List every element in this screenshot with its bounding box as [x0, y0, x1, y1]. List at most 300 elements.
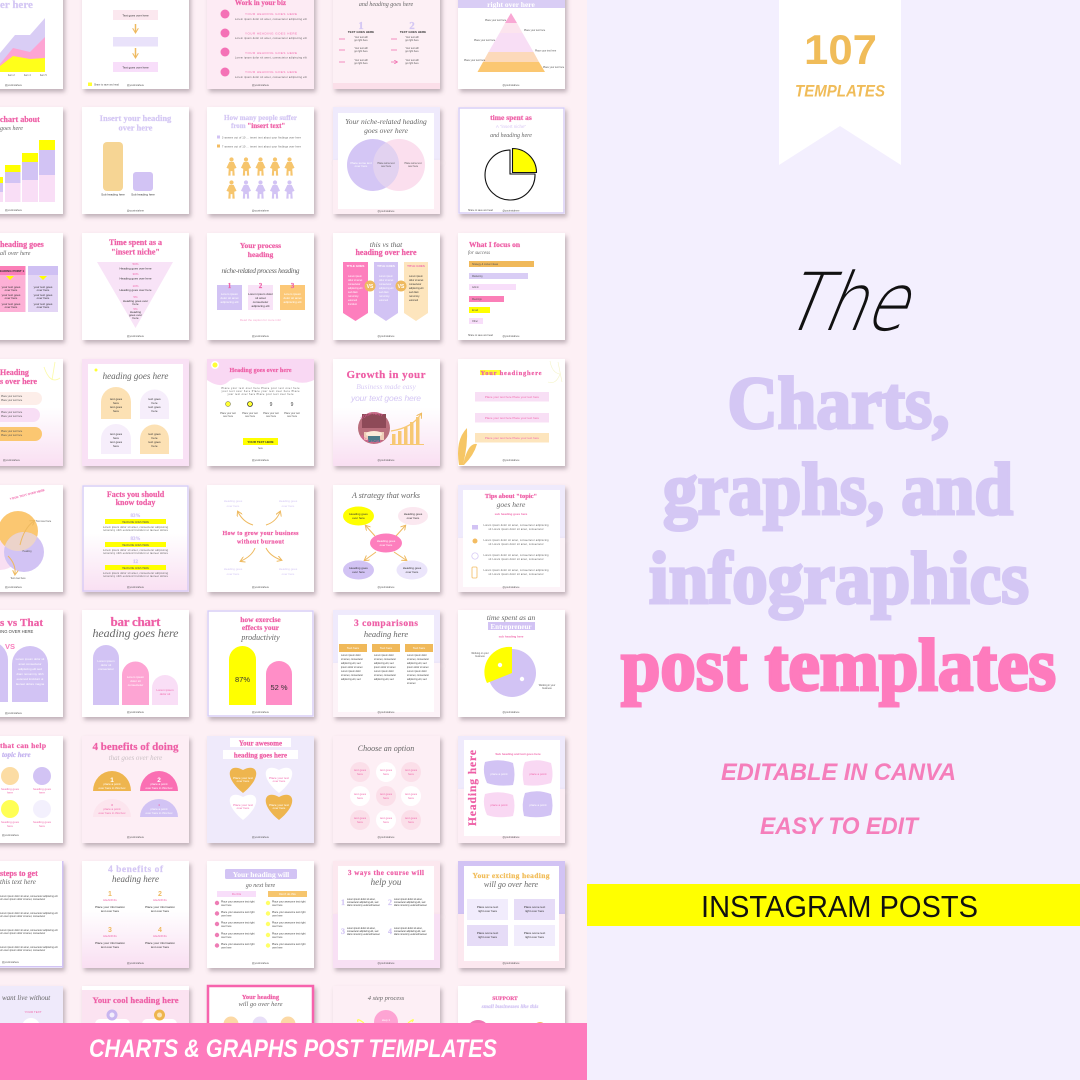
card: 3 ways: consectetur adipiscing elit, sed [347, 901, 379, 904]
card: 3 comparisons: Text here [347, 646, 359, 650]
card: stacked bar chart: goes here [0, 126, 23, 132]
card: numbered list [207, 0, 314, 89]
card: venn flow with arrows: YOUR TEXT OVER HERE [10, 488, 45, 500]
card: ribbon comparison: heading over here [355, 248, 417, 257]
card: two bars: Sub heading here [131, 192, 155, 196]
card: venn flow with arrows [0, 485, 68, 598]
card: two column checklist: @yourinstahere [252, 962, 270, 965]
card: stacked bar chart: @yourinstahere [5, 209, 23, 212]
card: four arrows radial: Heading goes [279, 499, 298, 503]
card: two column checklist: go next here [246, 883, 276, 889]
card: choose an option: here [357, 820, 363, 824]
card: funnel: Heading goes over [123, 299, 148, 303]
card: 4 step process: 4 step process [368, 995, 405, 1002]
card: choose an option: here [408, 796, 414, 800]
card: pyramid: Place your text here [535, 50, 557, 52]
card: entrepreneur pie: time spent as an [487, 613, 536, 622]
card: pie chart with yellow slice: Share to save and read [468, 209, 494, 212]
card: ribbon comparison: Lorem ipsum [348, 275, 362, 278]
card: pie chart with yellow slice [458, 107, 565, 214]
card: comparison panels: all over here [0, 251, 31, 257]
card: 3 ways: @yourinstahere [378, 962, 395, 965]
card: ribbon comparison: tincidunt [348, 303, 357, 306]
card: facts: Lorem ipsum dolor sit amet, consectetur adipiscing [103, 572, 169, 575]
card: two column arrows [333, 0, 440, 89]
card: can't live without: YOUR TEXT [24, 1010, 42, 1014]
card: pink border heading: will go over here [238, 1001, 283, 1008]
card: ribbon comparison: TITLE GOES [347, 264, 364, 268]
card: heading with leaf: Place your text here Place your text here [485, 436, 539, 440]
ribbon badge: 107 templates [779, 0, 901, 165]
card: two column arrows: go right here [354, 62, 368, 65]
card: horizontal bar chart: for success [468, 251, 490, 256]
card: cool heading flowers [82, 986, 189, 1080]
card: 4 step process [333, 986, 440, 1080]
card: process steps: Read the caption for more info! [240, 318, 281, 322]
card: heading with leaf [458, 359, 565, 466]
card: pyramid: Place your text here [464, 59, 486, 62]
card: stacked blobs: Place your text here [1, 395, 23, 398]
card: four colored circles: here [7, 790, 13, 794]
card: tips with icons: sub heading goes here [495, 512, 528, 516]
card: ribbon comparison: dolor sit amet [409, 279, 424, 282]
card: mind map: over here [352, 570, 365, 574]
card: can't live without [0, 986, 63, 1080]
card: venn diagram: @yourinstahere [378, 210, 395, 213]
card: horizontal bar chart: Marketing [472, 275, 483, 278]
card: heading with leaf: Place your text here Place your text here [485, 395, 539, 399]
card: 4 benefits domes: place a point [150, 782, 168, 786]
card: 3 ways: 2 [388, 898, 392, 907]
card: venn diagram: over here [381, 165, 392, 168]
card: mind map: over here [407, 516, 420, 520]
card: choose an option: here [383, 820, 389, 824]
card: funnel: Heading goes over here [119, 288, 152, 292]
card: ribbon comparison: @yourinstahere [378, 335, 395, 338]
card: hearts: heading goes here [234, 752, 287, 760]
card: process steps: Your process [240, 241, 281, 250]
card: venn flow with arrows: Heading [23, 550, 32, 553]
card: arch bar chart: Lorem ipsum [156, 688, 174, 692]
right panel [587, 0, 1080, 1080]
card: two column checklist: Place your awesome text right [221, 922, 255, 924]
card: 4 benefits numbered: 1 [108, 891, 112, 898]
card: people pictogram: 3 women out of 10 ... insert text about your findings over here [222, 136, 302, 140]
card: two column arrows: TEXT GOES HERE [400, 30, 426, 34]
card: funnel [82, 233, 189, 340]
card: 4 benefits domes: 1 [110, 777, 114, 784]
card: pyramid: Place your text here [485, 19, 507, 22]
card: mind map: A strategy that works [351, 491, 420, 500]
card: comparison panels: over here [37, 305, 50, 309]
card: process steps: 2 [259, 282, 263, 290]
card: horizontal bar chart: @yourinstahere [503, 335, 520, 338]
card: four colored circles: here [39, 790, 45, 794]
card: ribbon comparison: euismod [348, 299, 358, 302]
card: ribbon comparison: TITLE GOES [377, 264, 395, 268]
card: four colored circles: @yourinstahere [2, 834, 20, 837]
card: steps to get: Lorem ipsum dolor sit amet, consectetur adipiscing elit [0, 895, 58, 898]
card: 3 comparisons: adipiscing elit, sed [407, 662, 427, 665]
card: 4 benefits numbered: text over here [151, 909, 170, 913]
card: two column arrows: Your text will [354, 36, 368, 39]
card: two column arrows: go right here [405, 62, 419, 65]
card: entrepreneur pie: business [542, 687, 553, 690]
card: four arches: here [151, 436, 158, 440]
card: ribbon comparison: Lorem ipsum [379, 275, 393, 278]
card: ribbon comparison: nonummy [348, 295, 359, 298]
card: this vs that arches: laoreet dolore magna [16, 682, 45, 686]
card: comparison panels: heading goes [0, 240, 44, 249]
card: process steps: sit amet [255, 296, 266, 300]
card: hearts: Place your text [269, 776, 289, 780]
card: process steps: dolor sit amet [220, 296, 239, 300]
card: facts: 83% [130, 514, 140, 519]
card: 4 benefits numbered: HEADING [153, 898, 167, 902]
card: comparison panels: your text goes [2, 302, 21, 306]
card: ribbon comparison: euismod [409, 299, 419, 302]
card: hearts: over here [237, 779, 250, 783]
card: four colored circles: heading goes [1, 787, 20, 791]
card: wavy header with icons: Place your text over here Place your text over here [222, 387, 300, 390]
card: 4 benefits numbered: @yourinstahere [127, 962, 145, 965]
card: 4 benefits numbered: 3 [108, 927, 112, 934]
card: exciting heading boxes: right over here [525, 909, 545, 913]
card: ribbon comparison: TITLE GOES [407, 264, 425, 268]
card: steps to get: this text here [0, 878, 36, 886]
card: mind map: Heading goes [349, 512, 368, 516]
card: steps to get [0, 861, 64, 968]
card: exciting heading boxes: Place some text [524, 905, 545, 909]
card: four colored circles: heading goes [1, 820, 20, 824]
card: facts: Facts you should [107, 490, 165, 499]
card: four arches: text goes [110, 397, 123, 401]
card: this vs that arches [0, 610, 63, 717]
card: four arches: text goes [148, 397, 161, 401]
card: 4 benefits domes: place a point [103, 807, 121, 811]
card: mind map: Heading goes [403, 566, 422, 570]
card: numbered list: @yourinstahere [252, 84, 270, 87]
card: pyramid: Place your text here [524, 29, 546, 32]
card: 4 benefits numbered: HEADING [103, 898, 117, 902]
card: wavy header with icons: your text over here Place your text over here Place [222, 390, 300, 393]
card: support small business [458, 986, 565, 1080]
card: 3 ways: 3 [341, 927, 345, 936]
card: funnel: 5% [133, 307, 138, 311]
card: four arches: text goes [148, 432, 161, 436]
card: facts: nonummy nibh euismod tincidunt ut laoreet dolore [103, 552, 169, 555]
card: comparison panels: your text goes [34, 285, 53, 289]
card: two column checklist: Place your awesome text right [272, 932, 306, 936]
card: steps to get: Lorem ipsum dolor sit amet, consectetur adipiscing elit [0, 912, 58, 915]
card: process steps [207, 233, 314, 340]
card: this vs that arches: diam nonummy nibh [16, 672, 44, 676]
card: funnel: 5% [133, 295, 138, 299]
card: comparison panels: your text goes [34, 293, 53, 297]
card: four arches: text goes [148, 405, 161, 409]
card: exciting heading boxes: right over here [478, 935, 498, 939]
card: yellow and pink arch percentages: effects your [242, 623, 280, 632]
card: arch bar chart: @yourinstahere [127, 711, 145, 714]
card: 3 comparisons: sit amet, consectetur [407, 674, 429, 677]
card: tips with icons: Lorem ipsum dolor sit amet, consectetur adipiscing [484, 524, 549, 527]
card: hearts: Place your text [233, 776, 253, 780]
card: stacked blobs: Heading [0, 368, 29, 377]
card: choose an option: here [383, 796, 389, 800]
card: pie chart with yellow slice: time spent as [490, 113, 532, 122]
card: 4 benefits numbered: Place your information [95, 905, 125, 909]
card: stacked blobs: s over here [0, 377, 37, 386]
card: entrepreneur pie [458, 610, 565, 717]
card: 3 ways: diam nonummy euismod laoreet [394, 904, 427, 907]
card: choose an option: here [357, 772, 363, 776]
card: two column arrows: go right here [354, 50, 368, 53]
card: 4 benefits numbered: HEADING [153, 934, 167, 938]
card: two column checklist: Do this [232, 892, 242, 896]
card: comparison panels: over here [5, 288, 18, 292]
card: four arches: here [113, 401, 119, 405]
card: flow steps: Text goes over here [122, 66, 149, 70]
card: tips with icons: sit Lorem ipsum dolor sit amet, consectetur [488, 558, 544, 561]
card: yellow and pink arch percentages: 52 % [270, 683, 288, 692]
card: hearts: Your awesome [239, 740, 282, 748]
card: 3 ways: diam nonummy euismod laoreet [347, 933, 380, 936]
text: easy to edit: EASY TO EDIT [760, 813, 920, 840]
card: yellow and pink arch percentages [207, 610, 314, 717]
card: ribbon comparison: consectetur [348, 283, 361, 286]
card: 4 benefits numbered: heading here [112, 874, 159, 884]
card: entrepreneur pie: sub heading here [499, 634, 524, 638]
title line: post templates: post templates [621, 625, 1056, 707]
card: 4 benefits numbered: 2 [158, 891, 162, 898]
card: process steps: adipiscing elit [220, 300, 239, 304]
card: funnel: 50% [132, 262, 139, 266]
card: choose an option [333, 736, 440, 843]
card: horizontal bar chart: Admin [472, 286, 479, 289]
card: venn diagram: Place some text [350, 161, 372, 165]
card: stacked blobs: @yourinstahere [3, 459, 21, 462]
card: 4 benefits domes: place a point [103, 782, 121, 786]
card: choose an option: here [383, 772, 389, 776]
card: growth in your business [332, 359, 444, 472]
card: comparison panels: over here [5, 296, 18, 300]
card: steps to get: ut Lorem ipsum dolor sit amet, consectetur [0, 915, 45, 918]
card: four arches: here [151, 409, 158, 413]
card: tips with icons: sit Lorem ipsum dolor sit amet, consectetur [488, 528, 544, 531]
card: exciting heading boxes: right over here [478, 909, 498, 913]
card: wavy header with icons: over here [223, 415, 234, 418]
card: two column checklist: Place your awesome text right [221, 943, 255, 946]
card: horizontal bar chart: Share to save and read [468, 334, 494, 337]
card: 3 comparisons: Lorem ipsum dolor [341, 654, 361, 657]
card: steps to get: steps to get [0, 869, 38, 878]
card: comparison panels: your text goes [34, 302, 53, 306]
card: stacked bar chart [0, 107, 63, 214]
card: venn flow with arrows: Text over here [36, 520, 52, 523]
card: this vs that arches: euismod tincidunt ut [17, 677, 44, 681]
card: comparison panels: over here [37, 288, 50, 292]
card: arch bar chart: Lorem ipsum [127, 675, 145, 679]
card: horizontal bar chart: What I focus on [469, 240, 521, 249]
card: two column checklist: over here [221, 925, 232, 928]
card: horizontal bar chart: Other [472, 320, 478, 323]
card: process steps: Lorem ipsum dolor [248, 292, 273, 296]
card: ribbon comparison: nonummy [409, 295, 420, 298]
card: 4 benefits domes: place a point [150, 807, 168, 811]
card: arch bar chart: heading goes here [92, 626, 179, 640]
card: 3 comparisons: sit amet [407, 682, 416, 685]
card: 3 comparisons: adipiscing elit, sed [407, 678, 427, 681]
card: two column arrows: Your text will [354, 59, 368, 62]
card: 4 benefits numbered: HEADING [103, 934, 117, 938]
card: yellow and pink arch percentages: how exercise [240, 615, 281, 624]
card: numbered list: Lorem ipsum dolor sit amet, consectetur adipiscing elit [235, 76, 307, 79]
card: 4 benefits domes: 2 [157, 777, 161, 784]
card: 3 ways: Lorem ipsum dolor sit amet, [394, 898, 423, 901]
card: 4 benefits numbered: text over here [101, 945, 120, 949]
card: choose an option: Choose an option [358, 744, 414, 753]
card: process steps: dolor sit amet [283, 296, 302, 300]
card: exciting heading boxes: Place some text [477, 905, 498, 909]
card: area chart [0, 0, 63, 89]
card: wavy header with icons: your text over here Place your text over here [228, 393, 294, 396]
card: growth in your business: Business made easy [356, 382, 416, 391]
card: facts: nonummy nibh euismod tincidunt ut laoreet dolore [103, 575, 169, 578]
card: exciting heading boxes [458, 861, 565, 968]
card: 4 benefits numbered: Place your information [95, 941, 125, 945]
card: exciting heading boxes: @yourinstahere [503, 962, 520, 965]
card: wavy header with icons: 9 [291, 402, 294, 408]
card: yellow and pink arch percentages: productivity [240, 633, 280, 642]
card: mind map: over here [406, 570, 419, 574]
card: wavy header with icons [207, 359, 314, 466]
card: can't live without: want live without [2, 994, 51, 1002]
card: hearts: over here [273, 806, 286, 810]
card: mind map: Heading goes [377, 539, 396, 543]
card: choose an option: text goes [380, 816, 393, 820]
card: two column checklist: Place your awesome text right [221, 900, 255, 904]
card: comparison panels: over here [5, 305, 18, 309]
card: funnel: here [132, 316, 139, 320]
script word: The: The [772, 256, 934, 349]
card: arch bar chart: Lorem ipsum [97, 659, 115, 663]
card: four colored circles: heading goes [33, 820, 52, 824]
card: people pictogram [207, 107, 314, 214]
card: 3 comparisons: Text here [413, 646, 425, 650]
card: facts: HEADLINE GOES HERE [122, 567, 149, 570]
card: two column checklist: over here [272, 936, 283, 939]
card: four arrows radial: Heading goes [224, 499, 243, 503]
card: 4 benefits numbered: text over here [151, 945, 170, 949]
card: pink border heading [208, 986, 313, 1080]
card: 3 comparisons: Lorem ipsum dolor [374, 670, 394, 673]
ribbon badge: 107 templates: TEMPLATES [795, 82, 885, 100]
card: 3 comparisons: adipiscing elit, sed [341, 678, 361, 681]
card: two column arrows: TEXT GOES HERE [348, 30, 374, 34]
card: two bars: over here [119, 122, 153, 132]
card: ribbon comparison: sed diam [379, 291, 389, 294]
card: ribbon comparison: this vs that [370, 240, 403, 249]
card: four colored circles: here [7, 824, 13, 828]
card: vertical heading blobs: Heading here [467, 750, 479, 826]
card: vertical heading blobs [458, 736, 565, 843]
card: mind map [333, 485, 440, 592]
card: steps to get: @yourinstahere [2, 961, 20, 964]
card: growth in your business: your text goes here [350, 393, 421, 403]
card: facts: know today [116, 498, 155, 507]
card: four arches: here [151, 444, 158, 448]
card: ribbon comparison: nonummy [379, 295, 390, 298]
card: 3 ways: Lorem ipsum dolor sit amet, [394, 927, 423, 930]
card: 3 comparisons: Text here [380, 646, 392, 650]
card: 4 benefits domes: over here in this box [145, 811, 173, 815]
card: people pictogram: @yourinstahere [252, 210, 270, 212]
card: two column checklist: over here [272, 904, 283, 907]
card: hearts: Place your text [269, 803, 289, 807]
card: this vs that arches: @yourinstahere [5, 712, 23, 715]
card: area chart: Item 4 [24, 74, 31, 77]
card: four arrows radial: Heading goes [279, 567, 298, 571]
card: process steps: heading [248, 250, 273, 259]
card: vertical heading blobs: @yourinstahere [503, 836, 520, 839]
card: comparison panels: your text goes [2, 285, 21, 289]
card: arch bar chart: consectetur [128, 683, 143, 687]
card: process steps: @yourinstahere [252, 335, 270, 338]
card: ribbon comparison: VS [398, 284, 405, 290]
card: wavy header with icons: YOUR TEXT HERE [247, 440, 274, 444]
card: two column arrows: Your text will [405, 36, 419, 39]
card: 3 comparisons: sit amet, consectetur [341, 658, 363, 661]
card: four arches: here [113, 436, 119, 440]
card: heading with leaf: @yourinstahere [503, 459, 520, 462]
card: four arrows radial: over here [282, 572, 295, 576]
card: tips with icons: goes here [497, 500, 526, 509]
card: facts: 12 [133, 560, 138, 565]
card: 3 comparisons: ipsum dolor sit amet [374, 666, 396, 669]
card: four arches: heading goes here [103, 371, 168, 381]
card: people pictogram: from "insert text" [231, 122, 285, 130]
card: ribbon comparison: consectetur [379, 283, 392, 286]
card: 4 benefits domes: that goes over here [109, 754, 162, 762]
card: 3 comparisons: sit amet, consectetur [374, 674, 396, 677]
card: entrepreneur pie: Entrepreneur [491, 623, 531, 631]
text: editable in Canva: EDITABLE IN CANVA [721, 759, 956, 786]
title line: graphs, and: graphs, and [663, 449, 1013, 531]
card: 4 benefits domes: 3 [111, 803, 113, 807]
card: 4 benefits numbered: text over here [101, 909, 120, 913]
card: choose an option: here [408, 820, 414, 824]
card: venn diagram: Your niche-related heading [345, 117, 427, 126]
card: entrepreneur pie: Working on your [471, 652, 489, 655]
card: choose an option: text goes [405, 792, 418, 796]
card: four arches [82, 359, 189, 466]
card: 3 comparisons: Lorem ipsum dolor [407, 670, 427, 673]
panel: template grid [0, 0, 570, 1023]
card: funnel: here [132, 302, 139, 306]
card: comparison panels [0, 233, 63, 340]
card: comparison panels: your text goes [2, 293, 21, 297]
card: hearts: over here [237, 806, 250, 810]
card: ribbon comparison: adipiscing elit [348, 287, 363, 290]
card: horizontal bar chart: Meetings [472, 298, 483, 301]
card: two column arrows: go right here [354, 39, 368, 42]
card: two column arrows: go right here [405, 50, 419, 53]
card: funnel: Heading goes over here [119, 266, 152, 270]
banner: Instagram posts [587, 884, 1080, 926]
card: wavy header with icons: over here [266, 415, 277, 418]
card: mind map: over here [380, 543, 393, 547]
card: arch bar chart: dolor sit [160, 692, 170, 696]
